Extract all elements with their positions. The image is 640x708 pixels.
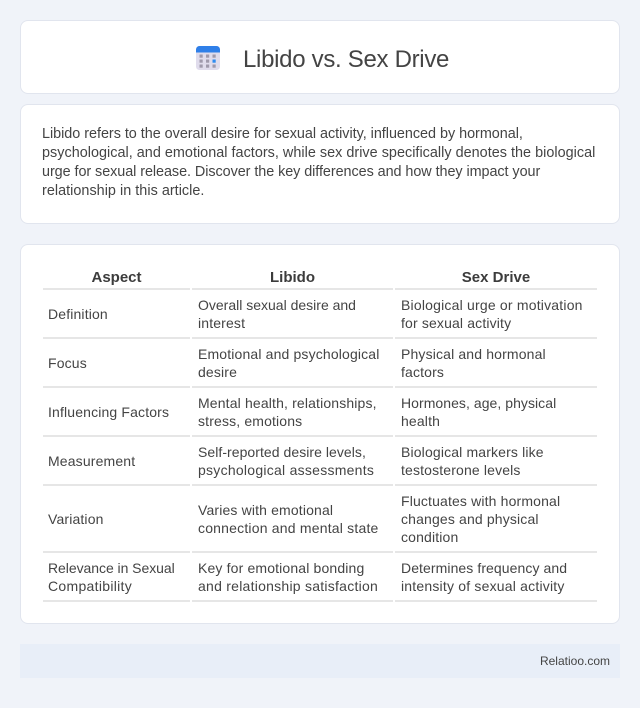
comparison table: interest [198, 315, 245, 331]
comparison table: Varies with emotional [198, 502, 333, 518]
comparison table: testosterone levels [401, 462, 521, 478]
row: definition: Definition [48, 306, 108, 322]
comparison table: Fluctuates with hormonal [401, 493, 560, 509]
comparison table: Overall sexual desire and [198, 297, 356, 313]
comparison table: Biological markers like [401, 444, 544, 460]
intro panel [20, 104, 620, 224]
comparison table: condition [401, 529, 458, 545]
comparison table: Determines frequency and [401, 560, 567, 576]
comparison table: changes and physical [401, 511, 539, 527]
row: influencing factors: Influencing Factors [48, 404, 169, 420]
comparison table: psychological assessments [198, 462, 374, 478]
intro text: psychological, and emotional factors, while sex drive specifically denotes the biological [42, 145, 595, 161]
row: focus: Focus [48, 355, 87, 371]
intro text: urge for sexual release. Discover the key differences and how they impact your [42, 164, 540, 180]
comparison table: for sexual activity [401, 315, 511, 331]
comparison table: connection and mental state [198, 520, 379, 536]
header panel [20, 20, 620, 94]
header: aspect: Aspect [91, 269, 142, 286]
comparison table: Hormones, age, physical [401, 395, 556, 411]
row: relevance in sexual compatibility: Relevance in Sexual [48, 560, 175, 576]
comparison table: stress, emotions [198, 413, 302, 429]
row: relevance in sexual compatibility [48, 560, 175, 594]
table panel [20, 244, 620, 624]
comparison table: Biological urge or motivation [401, 297, 583, 313]
comparison table: Physical and hormonal [401, 346, 546, 362]
comparison table: Key for emotional bonding [198, 560, 364, 576]
footer source text: Relatioo.com [540, 654, 610, 668]
footer bar [20, 644, 620, 678]
row: relevance in sexual compatibility: Compatibility [48, 578, 132, 594]
intro text: Libido refers to the overall desire for sexual activity, influenced by hormonal, [42, 126, 523, 142]
comparison table: Self-reported desire levels, [198, 444, 366, 460]
row: variation: Variation [48, 511, 104, 527]
comparison table [43, 269, 597, 602]
header: libido: Libido [270, 269, 315, 286]
row: measurement: Measurement [48, 453, 135, 469]
comparison table: and relationship satisfaction [198, 578, 378, 594]
comparison table: health [401, 413, 440, 429]
comparison table: Mental health, relationships, [198, 395, 377, 411]
intro text: relationship in this article. [42, 183, 204, 199]
comparison table: factors [401, 364, 444, 380]
comparison table: desire [198, 364, 237, 380]
header: sex drive: Sex Drive [462, 269, 530, 286]
comparison table: intensity of sexual activity [401, 578, 565, 594]
title: Libido vs. Sex Drive [243, 46, 449, 73]
intro text [42, 126, 595, 199]
icon: calendar [196, 46, 220, 70]
comparison table: Emotional and psychological [198, 346, 380, 362]
